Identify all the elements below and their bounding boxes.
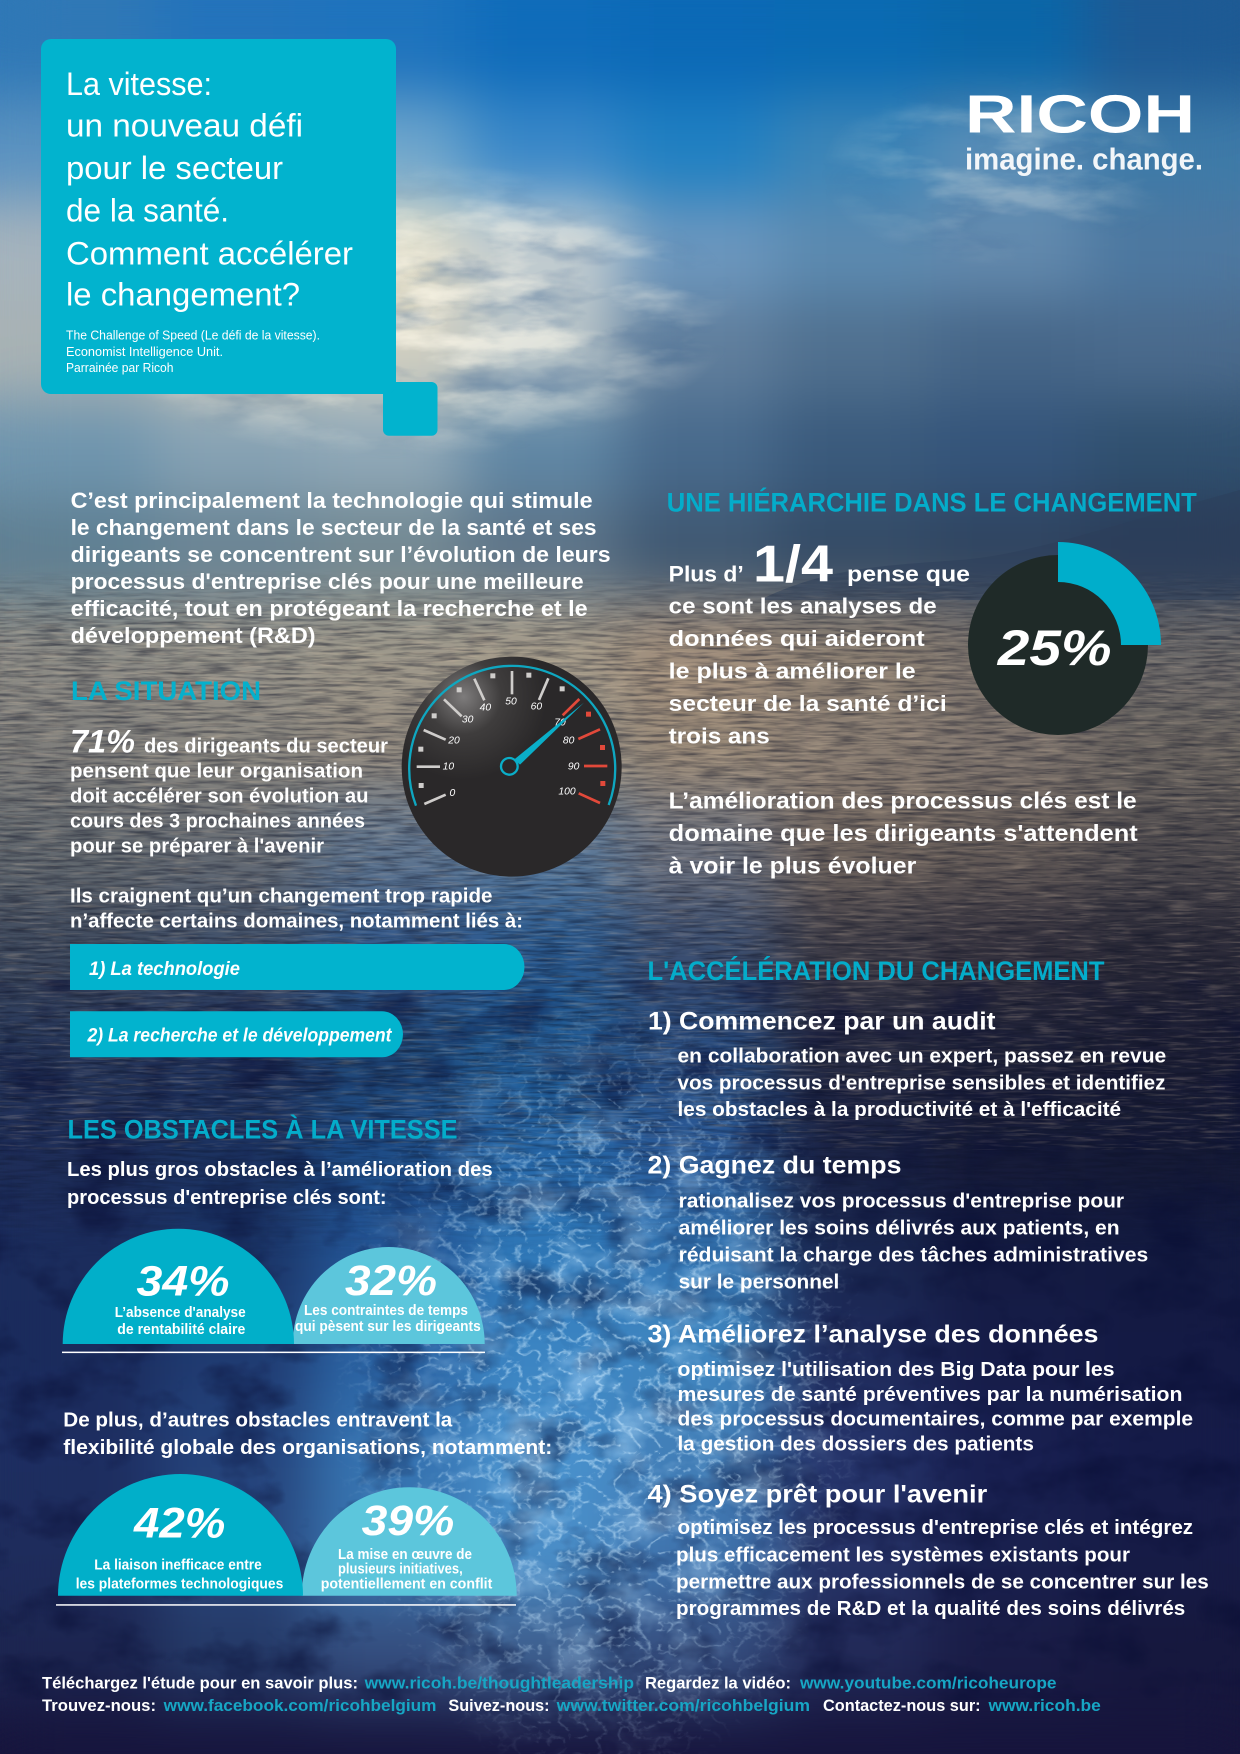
speedometer gauge: 10	[443, 761, 454, 772]
speedometer gauge: 80	[563, 735, 575, 746]
speedometer gauge: 100	[558, 786, 576, 797]
title text: un nouveau défi	[66, 108, 303, 144]
speedometer gauge: 60	[531, 701, 542, 712]
semicircle stats: 42%	[58, 1474, 303, 1596]
title panel	[41, 39, 438, 436]
step 3: données	[648, 1321, 1193, 1456]
heading: obstacles: LES OBSTACLES À LA VITESSE	[68, 1113, 458, 1144]
intro text: développement (R&D)	[71, 623, 316, 648]
step 1: audit: vos processus d'entreprise sensibles et identifiez	[678, 1071, 1166, 1094]
speedometer gauge: 70	[554, 717, 566, 728]
step 4: avenir: plus efficacement les systèmes existants pour	[676, 1544, 1130, 1567]
footer links: Regardez la vidéo:	[645, 1673, 791, 1692]
semicircle stats: 34%: 34%	[136, 1258, 230, 1306]
step 2: temps: sur le personnel	[679, 1270, 839, 1293]
text: 71% statistic: cours des 3 prochaines années	[70, 810, 365, 832]
intro text: le changement dans le secteur de la santé et ses	[71, 515, 597, 540]
logo: Ricoh	[965, 85, 1203, 176]
step 4: avenir: 4) Soyez prêt pour l'avenir	[648, 1480, 987, 1508]
text: 71% statistic: des dirigeants du secteur	[144, 736, 388, 758]
speedometer gauge: 0	[449, 788, 455, 799]
bar: la technologie	[70, 944, 524, 990]
bar: la recherche: 2) La recherche et le développement	[87, 1025, 393, 1047]
text: one quarter statistic	[669, 536, 970, 748]
text: 71% statistic: pensent que leur organisation	[70, 760, 363, 782]
text: obstacles intro: Les plus gros obstacles à l’amélioration des	[67, 1158, 493, 1181]
step 4: avenir: optimisez les processus d'entreprise clés et intégrez	[678, 1516, 1193, 1539]
text: fears: Ils craignent qu’un changement trop rapide	[70, 884, 492, 907]
source note: Parrainée par Ricoh	[66, 361, 174, 375]
text: one quarter statistic: le plus à améliorer le	[669, 658, 916, 683]
footer links: www.twitter.com/ricohbelgium	[556, 1696, 810, 1715]
text: other obstacles: flexibilité globale des organisations, notamment:	[63, 1436, 552, 1459]
text: obstacles intro: processus d'entreprise clés sont:	[67, 1186, 387, 1209]
step 4: avenir: permettre aux professionnels de se concentrer sur les	[676, 1570, 1209, 1593]
semicircle stats: 32%: qui pèsent sur les dirigeants	[295, 1319, 481, 1335]
donut chart: 25%: 25%	[997, 620, 1112, 676]
footer links: Trouvez-nous:	[42, 1696, 156, 1715]
step 3: données: des processus documentaires, comme par exemple	[678, 1408, 1193, 1431]
title text: pour le secteur	[66, 150, 283, 186]
bar: la recherche	[70, 1011, 403, 1057]
logo: Ricoh: RICOH	[965, 85, 1195, 145]
step 1: audit	[648, 1007, 1166, 1121]
title text: La vitesse:	[66, 66, 212, 102]
title text: le changement?	[66, 276, 300, 312]
text: one quarter statistic: Plus d’	[669, 562, 744, 587]
speedometer gauge: 50	[505, 696, 517, 707]
text: 71% statistic	[70, 724, 388, 857]
text: 71% statistic: pour se préparer à l'avenir	[70, 835, 324, 857]
text: one quarter statistic: données qui aideront	[669, 626, 925, 651]
step 3: données: optimisez l'utilisation des Big Data pour les	[678, 1358, 1114, 1381]
footer links: www.youtube.com/ricoheurope	[799, 1673, 1056, 1692]
step 1: audit: 1) Commencez par un audit	[648, 1007, 996, 1035]
step 2: temps: rationalisez vos processus d'entreprise pour	[679, 1190, 1124, 1213]
intro text: efficacité, tout en protégeant la recherche et le	[71, 596, 588, 621]
speedometer gauge: 20	[447, 735, 460, 746]
text: key processes: domaine que les dirigeants s'attendent	[669, 820, 1138, 846]
step 3: données: 3) Améliorez l’analyse des données	[648, 1321, 1098, 1349]
text: fears: n’affecte certains domaines, notamment liés à:	[70, 910, 523, 933]
step 1: audit: en collaboration avec un expert, passez en revue	[678, 1044, 1166, 1067]
text: one quarter statistic: secteur de la santé d’ici	[669, 691, 947, 716]
semicircle stats: 42%: les plateformes technologiques	[76, 1575, 283, 1592]
step 1: audit: les obstacles à la productivité et à l'efficacité	[678, 1098, 1121, 1121]
step 3: données: la gestion des dossiers des patients	[678, 1433, 1034, 1456]
text: one quarter statistic: trois ans	[669, 723, 770, 748]
semicircle stats: 39%	[302, 1487, 517, 1596]
text: one quarter statistic: pense que	[847, 562, 970, 587]
semicircle stats: 39%: plusieurs initiatives,	[338, 1561, 463, 1577]
step 2: temps: 2) Gagnez du temps	[648, 1151, 902, 1179]
logo: Ricoh: imagine. change.	[965, 141, 1203, 176]
text: fears	[70, 884, 523, 933]
semicircle stats: 39%: potentiellement en conflit	[321, 1576, 492, 1592]
step 2: temps: améliorer les soins délivrés aux patients, en	[679, 1216, 1120, 1239]
text: one quarter statistic: 1/4	[753, 536, 833, 594]
semicircle stats: 42%: La liaison inefficace entre	[94, 1556, 262, 1573]
intro text: processus d'entreprise clés pour une meilleure	[71, 569, 584, 594]
rule under first stats	[62, 1352, 485, 1353]
title text	[66, 66, 353, 312]
text: 71% statistic: 71%	[70, 724, 135, 760]
speedometer gauge: 30	[462, 714, 474, 725]
footer links: Contactez-nous sur:	[823, 1696, 981, 1715]
text: 71% statistic: doit accélérer son évolution au	[70, 785, 368, 807]
bar: la technologie: 1) La technologie	[89, 958, 240, 980]
source note: Economist Intelligence Unit.	[66, 345, 223, 359]
step 3: données: mesures de santé préventives par la numérisation	[678, 1383, 1182, 1406]
text: key processes: L’amélioration des processus clés est le	[669, 787, 1137, 813]
intro text: C’est principalement la technologie qui stimule	[71, 488, 593, 513]
heading: accélération: L'ACCÉLÉRATION DU CHANGEMENT	[648, 955, 1105, 986]
semicircle stats: 34%	[63, 1229, 294, 1344]
step 4: avenir: programmes de R&D et la qualité des soins délivrés	[676, 1597, 1185, 1620]
step 2: temps	[648, 1151, 1148, 1293]
heading: la situation: LA SITUATION	[71, 676, 261, 706]
footer links: Téléchargez l'étude pour en savoir plus:	[42, 1673, 358, 1692]
semicircle stats: 34%: L’absence d'analyse	[115, 1304, 246, 1321]
footer links: www.ricoh.be	[987, 1696, 1101, 1715]
semicircle stats: 32%	[293, 1247, 485, 1344]
semicircle stats: 32%: 32%	[345, 1257, 437, 1305]
donut chart: 25%	[968, 542, 1161, 735]
footer links: www.ricoh.be/thoughtleadership	[364, 1673, 634, 1692]
semicircle stats: 42%: 42%	[133, 1499, 225, 1547]
text: other obstacles	[63, 1409, 552, 1459]
text: key processes	[669, 787, 1138, 878]
rule under second stats	[56, 1604, 516, 1606]
text: obstacles intro	[67, 1158, 493, 1209]
footer links: Suivez-nous:	[448, 1696, 550, 1715]
speedometer gauge: 40	[480, 702, 491, 713]
speedometer gauge: 90	[568, 761, 580, 772]
intro text: dirigeants se concentrent sur l’évolution de leurs	[71, 542, 611, 567]
source note	[66, 328, 320, 375]
title text: Comment accélérer	[66, 235, 353, 271]
text: other obstacles: De plus, d’autres obstacles entravent la	[63, 1409, 453, 1432]
step 4: avenir	[648, 1480, 1209, 1620]
heading: hiérarchie: UNE HIÉRARCHIE DANS LE CHANGEMENT	[667, 487, 1197, 518]
semicircle stats: 34%: de rentabilité claire	[117, 1321, 245, 1338]
semicircle stats: 39%: La mise en œuvre de	[338, 1547, 472, 1563]
source note: The Challenge of Speed (Le défi de la vitesse).	[66, 328, 320, 342]
semicircle stats: 32%: Les contraintes de temps	[304, 1303, 468, 1319]
footer links	[42, 1673, 1101, 1715]
step 2: temps: réduisant la charge des tâches administratives	[679, 1244, 1148, 1267]
footer links: www.facebook.com/ricohbelgium	[163, 1696, 436, 1715]
speedometer gauge	[402, 657, 622, 877]
semicircle stats: 39%: 39%	[362, 1497, 454, 1545]
intro text	[71, 488, 611, 648]
text: key processes: à voir le plus évoluer	[669, 852, 916, 878]
title text: de la santé.	[66, 193, 229, 229]
text: one quarter statistic: ce sont les analyses de	[669, 593, 937, 618]
